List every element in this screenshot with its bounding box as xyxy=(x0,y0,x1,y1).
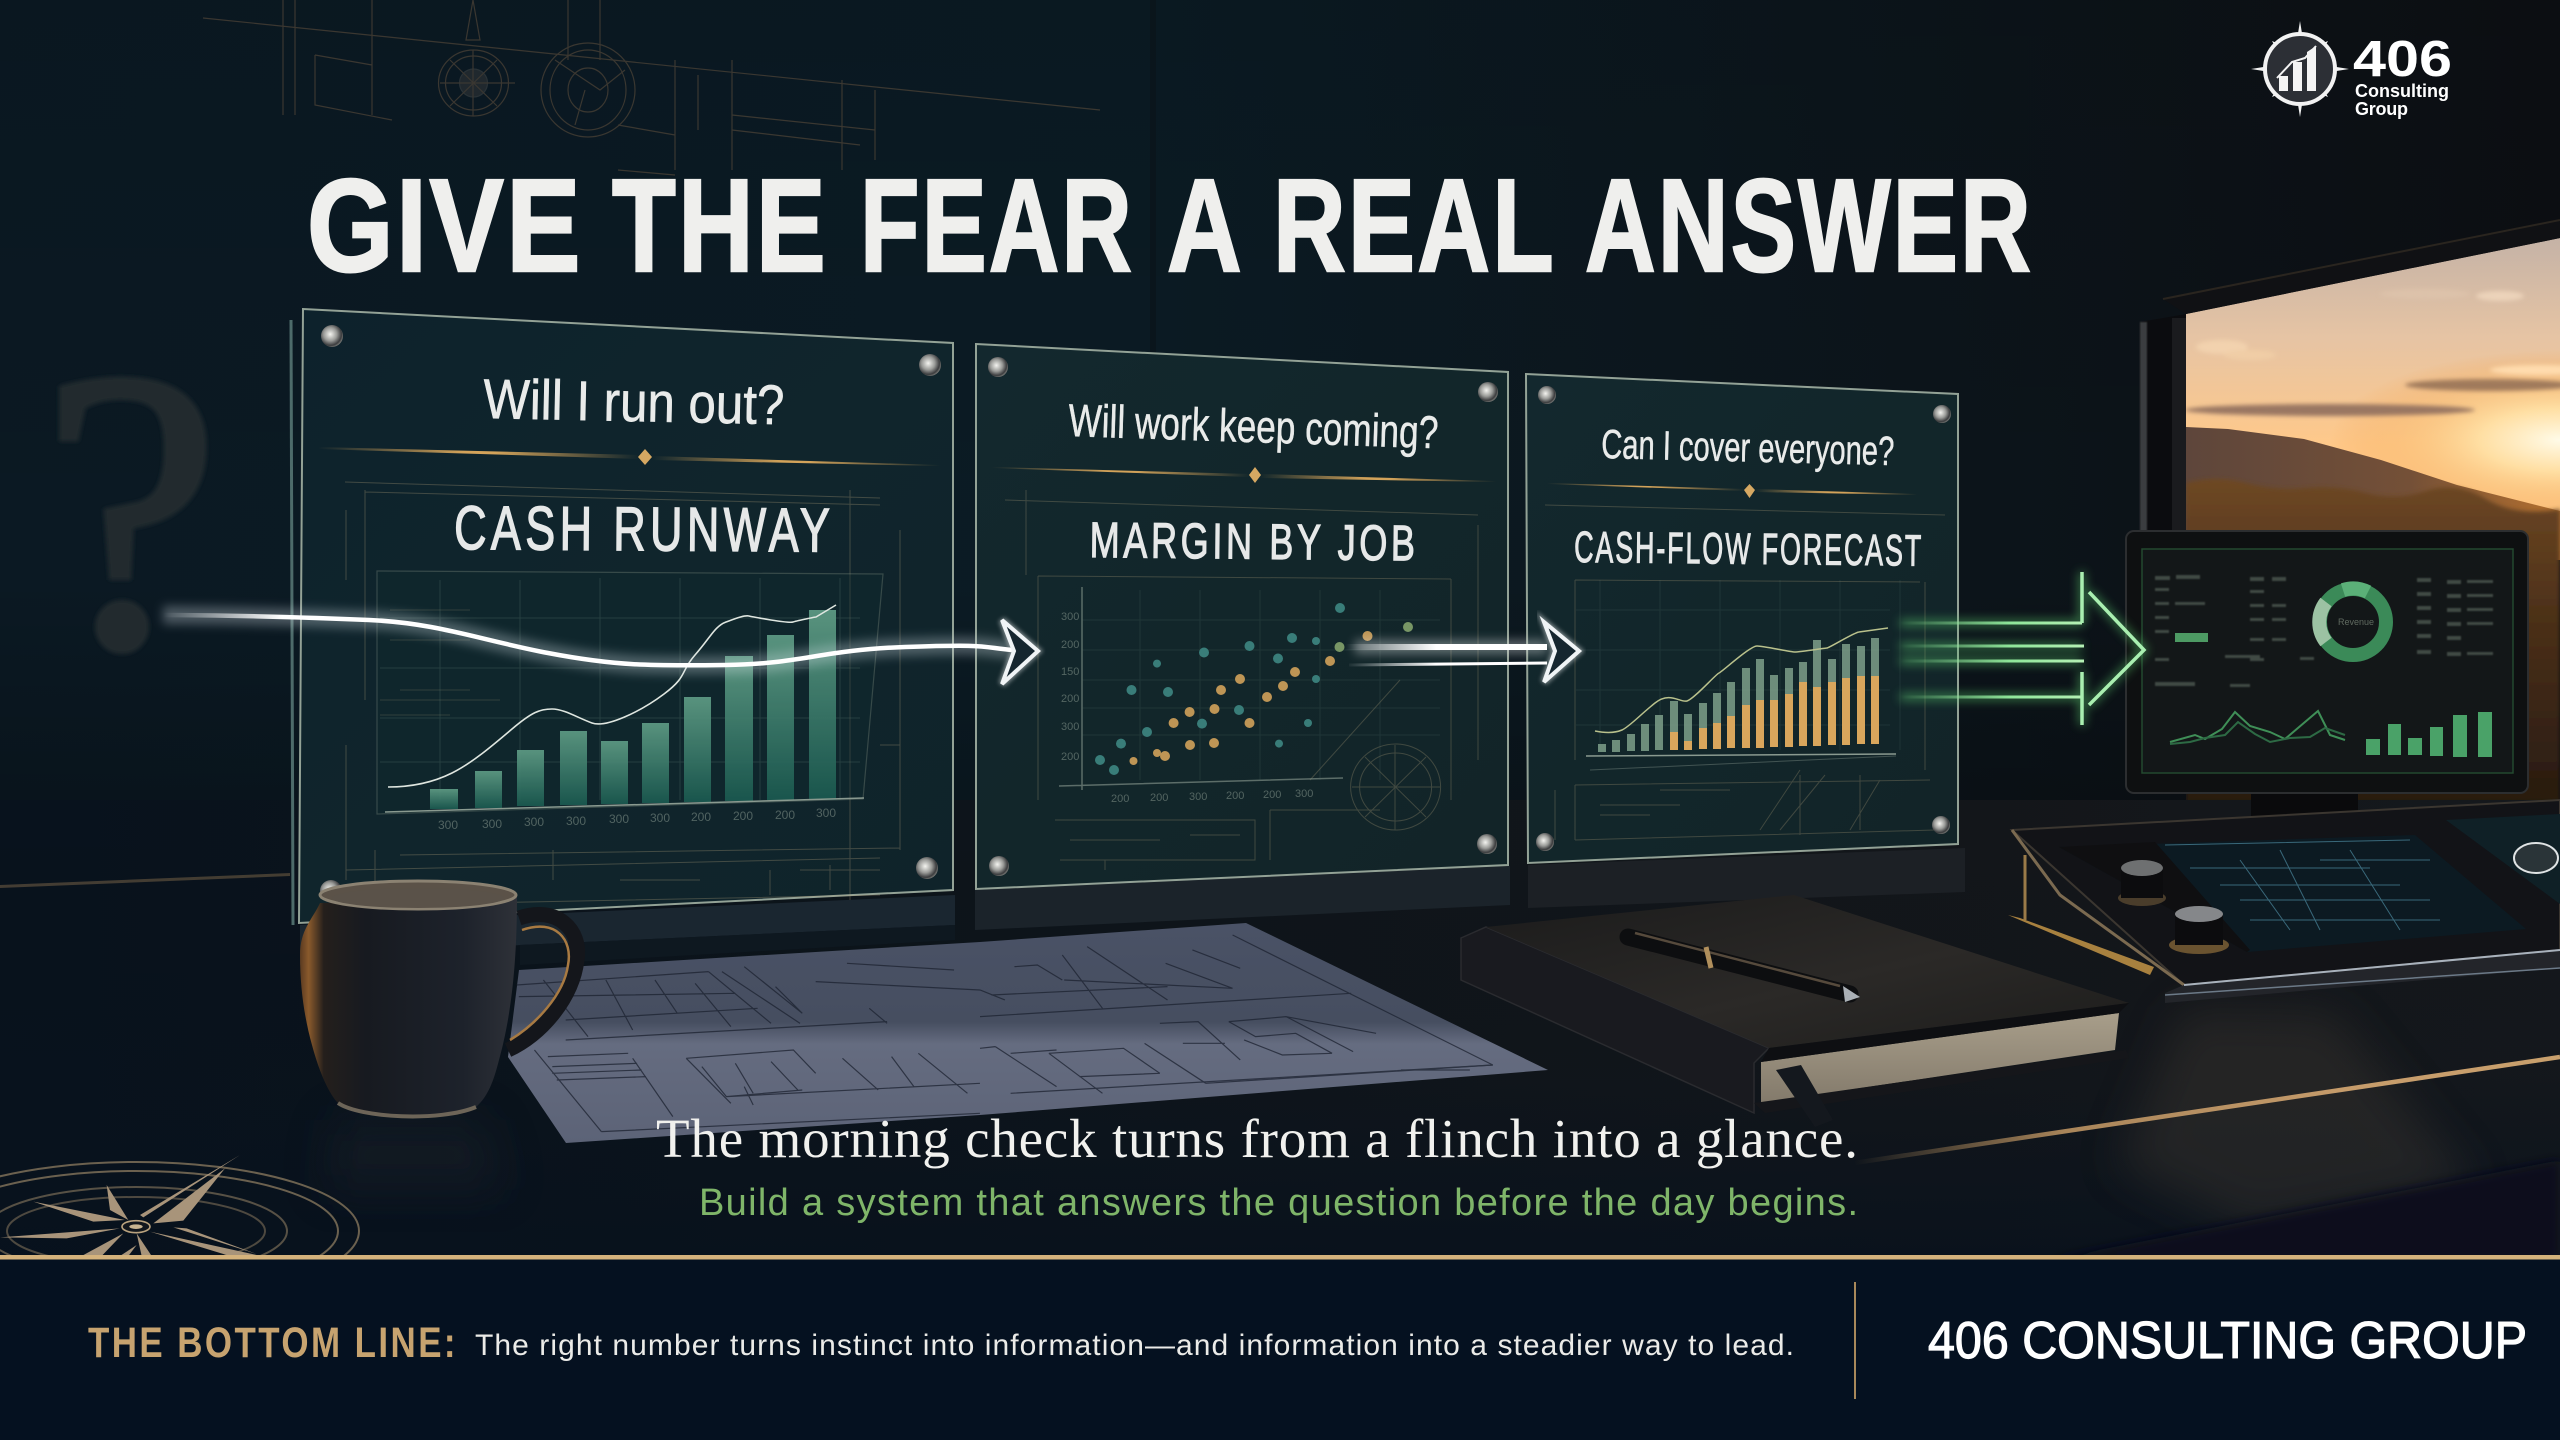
logo wordmark: 406 xyxy=(2353,30,2452,87)
blueprint paper xyxy=(508,923,1548,1143)
window with sunset view xyxy=(2140,219,2560,800)
scatter chart: 200 xyxy=(1061,693,1079,705)
blueprint lines on panel xyxy=(1005,490,1478,870)
mounting bolts xyxy=(320,325,941,902)
scatter chart: 300 xyxy=(1189,791,1207,803)
bar chart with trend line: 300 xyxy=(650,811,670,825)
footer bar xyxy=(0,1255,2560,1440)
line chart xyxy=(2170,711,2345,744)
blueprint lines on panel xyxy=(1545,505,1945,840)
scatter chart: 200 xyxy=(1061,639,1079,651)
bar chart with trend line: 300 xyxy=(816,806,836,820)
gold divider xyxy=(992,467,1496,483)
scatter chart: 200 xyxy=(1150,792,1168,804)
panel: cash runway xyxy=(291,309,953,925)
logo wordmark: Consulting xyxy=(2355,81,2449,101)
panel: margin by job xyxy=(976,344,1508,889)
pen xyxy=(1628,933,1860,1002)
gold divider xyxy=(1547,483,1917,498)
glass stand bases xyxy=(300,848,1965,965)
compass rose on desk xyxy=(0,1156,360,1255)
secondary screen with round icon xyxy=(2446,814,2560,904)
bar chart with trend line: 200 xyxy=(691,810,711,824)
glowing green arrow xyxy=(1900,572,2144,725)
bar chart with trend line: 200 xyxy=(733,809,753,823)
dashboard bar chart xyxy=(2366,712,2492,757)
logo: 406 consulting group xyxy=(2251,21,2452,119)
blueprint lines on panel xyxy=(345,482,900,905)
logo wordmark: Group xyxy=(2355,99,2408,119)
bar chart with trend line: 300 xyxy=(438,818,458,832)
title: REAL xyxy=(1273,152,1556,299)
logo wordmark xyxy=(2353,30,2452,119)
logo compass icon xyxy=(2251,21,2349,117)
question text: will work keep coming: Will work keep coming? xyxy=(1068,394,1439,458)
notebook with pen xyxy=(1461,895,2129,1127)
title: GIVE xyxy=(307,152,583,299)
glowing white flow arrow 1 xyxy=(163,615,1038,684)
panel: cash-flow forecast xyxy=(1526,374,1958,863)
donut chart xyxy=(2319,588,2386,655)
scatter chart: 200 xyxy=(1061,751,1079,763)
coffee mug xyxy=(300,881,578,1190)
scatter chart: 300 xyxy=(1061,721,1079,733)
faint wall blueprint sketches xyxy=(203,0,1100,175)
subline: build a system: Build a system that answers the question before the day begins. xyxy=(699,1182,1858,1224)
bar chart with trend line: 300 xyxy=(609,812,629,826)
stacked bar chart with line xyxy=(1576,580,1900,770)
scatter chart: 200 xyxy=(1226,790,1244,802)
scatter chart xyxy=(1059,587,1440,805)
metric name: cash runway: CASH RUNWAY xyxy=(454,494,834,566)
gold divider xyxy=(318,447,940,466)
desk monitor with dashboard xyxy=(2126,531,2528,816)
metric name: cash-flow forecast: CASH-FLOW FORECAST xyxy=(1574,523,1923,576)
question text: will I run out: Will I run out? xyxy=(483,367,785,436)
bottom line label: THE BOTTOM LINE: xyxy=(88,1319,458,1367)
desk surface xyxy=(0,800,2560,1260)
title: THE xyxy=(612,152,828,299)
decorative question mark: ? xyxy=(42,289,220,732)
donut chart: Revenue xyxy=(2338,617,2374,627)
title: ANSWER xyxy=(1585,152,2033,299)
background: wall xyxy=(0,0,2560,960)
bottom line sentence: The right number turns instinct into information—and information into a steadier way to lead. xyxy=(475,1329,1794,1362)
title xyxy=(307,152,2033,299)
mounting bolts xyxy=(988,357,1498,876)
title: A xyxy=(1167,152,1244,299)
scatter chart: 200 xyxy=(1263,789,1281,801)
bar chart with trend line: 300 xyxy=(482,817,502,831)
scatter chart: 300 xyxy=(1295,788,1313,800)
knobs xyxy=(2118,860,2229,954)
brand name: 406 CONSULTING GROUP xyxy=(1928,1312,2527,1370)
bar chart with trend line: 300 xyxy=(524,815,544,829)
metric name: margin by job: MARGIN BY JOB xyxy=(1089,512,1419,571)
scatter chart: 200 xyxy=(1111,793,1129,805)
bar chart with trend line xyxy=(377,571,883,832)
mounting bolts xyxy=(1536,386,1951,851)
bar chart with trend line: 300 xyxy=(566,814,586,828)
scatter chart: 150 xyxy=(1061,666,1079,678)
question text: can I cover everyone: Can I cover everyone? xyxy=(1601,421,1895,474)
tagline: morning check: The morning check turns from a flinch into a glance. xyxy=(656,1108,1858,1169)
bar chart with trend line: 200 xyxy=(775,808,795,822)
dashboard table xyxy=(2155,575,2493,687)
control panel tablet xyxy=(2008,800,2560,1003)
glowing white flow arrow 2 xyxy=(1345,622,1579,682)
title: FEAR xyxy=(860,152,1134,299)
blueprint tablet screen xyxy=(2059,835,2526,952)
scatter chart: 300 xyxy=(1061,611,1079,623)
